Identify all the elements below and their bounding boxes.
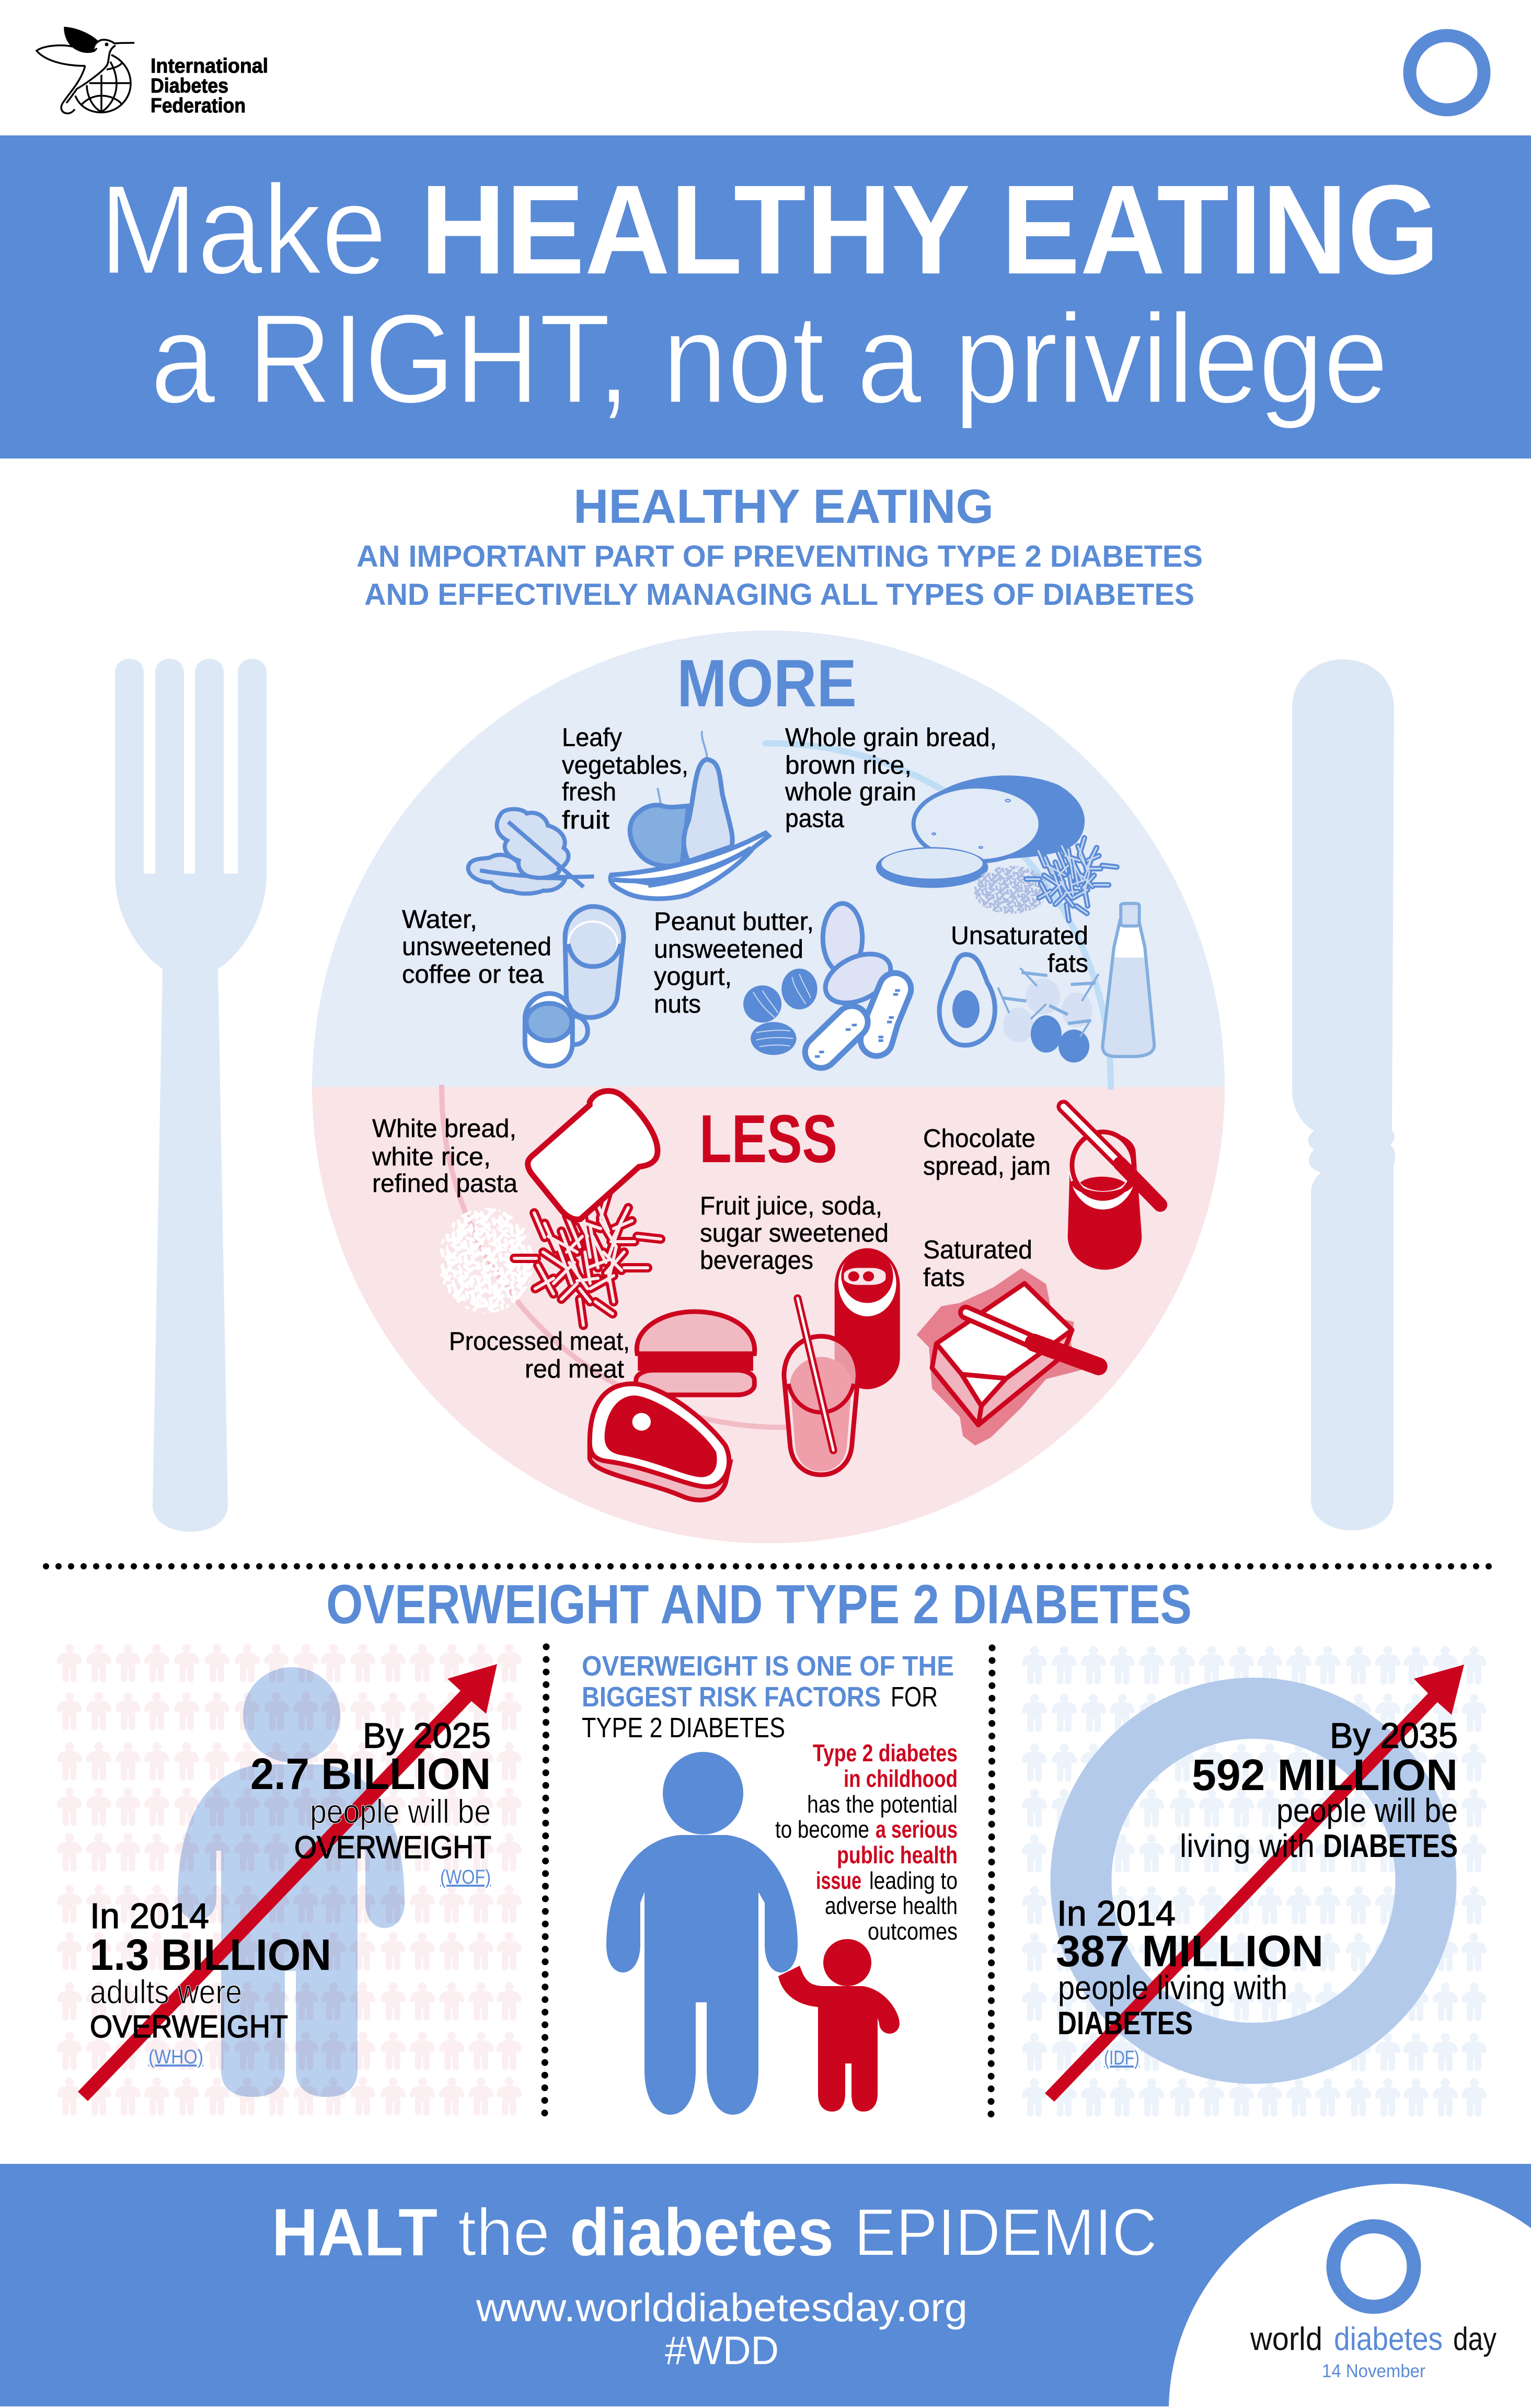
title line 2: a RIGHT, not a privilege (151, 288, 1388, 430)
icon: chocolate spread jar (1063, 1107, 1160, 1270)
label: unsaturated fats: Unsaturated (951, 922, 1088, 950)
label: water (402, 905, 551, 989)
icon: water glass (565, 907, 624, 1017)
title line 1: HEALTHY EATING (420, 159, 1440, 301)
stat: in 2014 (90, 1896, 331, 2068)
icon: blue circle top right (1410, 36, 1484, 110)
plate inner rim upper (766, 743, 1111, 1087)
label: white bread: refined pasta (372, 1169, 518, 1198)
icon: coffee cup (525, 993, 588, 1066)
icon: refined pasta (514, 1192, 661, 1325)
stat: in 2014 diabetes: (IDF) (1104, 2047, 1139, 2069)
footer slogan (272, 2195, 1157, 2270)
stat: by 2025: OVERWEIGHT (294, 1830, 491, 1865)
label: chocolate spread: spread, jam (923, 1152, 1051, 1180)
group: less foods (528, 1091, 1160, 1500)
arrow: overweight trend (78, 1664, 497, 2101)
panel: plate (312, 630, 1225, 1543)
label: processed meat (449, 1327, 630, 1383)
footer banner (0, 2164, 1531, 2406)
childhood diabetes note (775, 1739, 958, 1945)
childhood diabetes note: Type 2 diabetes (813, 1739, 958, 1767)
label: leafy vegetables: Leafy (562, 724, 622, 752)
icon: blue circle (1333, 2226, 1414, 2307)
icon: butter (917, 1268, 1099, 1446)
icon: soda can (835, 1248, 900, 1389)
childhood diabetes note: to become (775, 1816, 869, 1843)
label: whole grain: pasta (785, 805, 845, 833)
icon: steak (590, 1384, 730, 1500)
plate inner rim lower (442, 1085, 787, 1427)
childhood diabetes note: issue (816, 1867, 861, 1894)
stat: by 2025: 2.7 BILLION (250, 1749, 491, 1798)
icon: fruit (611, 731, 768, 899)
icon: brown rice (973, 866, 1049, 914)
panel: risk factors (582, 1650, 958, 2115)
stat: by 2035 (1180, 1716, 1458, 1864)
child figure (778, 1939, 900, 2112)
label: unsaturated fats: fats (1047, 949, 1088, 978)
stat: by 2035: By 2035 (1330, 1716, 1458, 1756)
big overweight person (178, 1667, 405, 2097)
stat: in 2014 diabetes: In 2014 (1057, 1894, 1176, 1933)
stat: by 2035: people will be (1276, 1792, 1458, 1829)
label: peanut butter: Peanut butter, (654, 908, 814, 936)
risk factors heading: TYPE 2 DIABETES (582, 1712, 785, 1744)
plate upper half: more (312, 630, 1225, 1087)
label: processed meat: Processed meat, (449, 1327, 630, 1356)
icon: yogurt and nuts (743, 903, 903, 1057)
childhood diabetes note: leading to (869, 1867, 958, 1894)
title banner (0, 135, 1531, 458)
vertical dotted separator right (991, 1648, 992, 2115)
vertical dotted separator left (545, 1647, 546, 2115)
label: saturated fats: Saturated (923, 1236, 1032, 1264)
label: white bread: White bread, (372, 1115, 516, 1143)
label: water: unsweetened (402, 933, 551, 961)
label: beverages: sugar sweetened (700, 1219, 889, 1247)
badge wordmark: world (1250, 2321, 1322, 2357)
label: white bread: white rice, (372, 1143, 491, 1171)
hummingbird and globe mark (37, 28, 134, 113)
label: peanut butter: unsweetened (654, 935, 803, 964)
label: saturated fats (923, 1236, 1032, 1292)
footer slogan: diabetes (570, 2195, 834, 2270)
badge date: 14 November (1322, 2361, 1425, 2381)
stat: by 2025 (250, 1716, 491, 1888)
risk factors heading: BIGGEST RISK FACTORS (582, 1681, 881, 1713)
label: peanut butter: yogurt, (654, 962, 732, 991)
group: more foods (468, 731, 1154, 1066)
logo wordmark: Diabetes (151, 75, 228, 97)
risk factors heading: OVERWEIGHT IS ONE OF THE (582, 1650, 954, 1682)
risk factors heading: FOR (891, 1681, 938, 1713)
world diabetes day badge (1169, 2184, 1531, 2406)
childhood diabetes note: has the potential (807, 1791, 958, 1818)
label: processed meat: red meat (525, 1355, 624, 1383)
icon: juice glass with straw (784, 1298, 858, 1475)
panel: diabetes statistics (1022, 1646, 1487, 2117)
stat: by 2025: By 2025 (363, 1716, 491, 1756)
pink figure grid (57, 1644, 522, 2116)
label: water: coffee or tea (402, 960, 544, 989)
plate lower half: less (312, 1087, 1225, 1543)
label: chocolate spread: Chocolate (923, 1125, 1035, 1153)
heading: healthy eating (356, 480, 1203, 612)
stat: by 2025: people will be (310, 1793, 491, 1830)
blue diabetes circle (1081, 1708, 1426, 2054)
label: leafy vegetables: fresh (562, 778, 616, 806)
footer slogan: EPIDEMIC (854, 2195, 1157, 2270)
childhood diabetes note: a serious (876, 1816, 958, 1843)
icon: burger (636, 1312, 755, 1395)
adult figure (606, 1752, 798, 2115)
stat: in 2014 diabetes: DIABETES (1057, 2005, 1193, 2042)
childhood diabetes note: adverse health (825, 1892, 958, 1919)
stat: by 2035: DIABETES (1323, 1828, 1458, 1864)
label: beverages: Fruit juice, soda, (700, 1192, 882, 1220)
footer hashtag: #WDD (665, 2329, 779, 2373)
label: beverages (700, 1192, 889, 1275)
IDF logo (37, 28, 268, 117)
label: peanut butter: nuts (654, 990, 701, 1018)
icon: blue pasta (1026, 838, 1117, 921)
label: whole grain: whole grain (785, 778, 916, 806)
childhood diabetes note: public health (837, 1841, 958, 1868)
icon: whole grain bread (876, 775, 1085, 888)
stat: in 2014: In 2014 (90, 1896, 209, 1936)
stat: by 2035: living with (1180, 1828, 1315, 1864)
label: whole grain: Whole grain bread, (785, 724, 997, 752)
icon: avocado (939, 955, 995, 1045)
arrow: diabetes trend (1045, 1665, 1464, 2102)
icon: leafy vegetables (468, 809, 594, 893)
stat: in 2014 diabetes: people living with (1058, 1969, 1287, 2006)
icon: knife (1292, 659, 1395, 1530)
label: leafy vegetables (562, 724, 688, 834)
logo wordmark (151, 55, 268, 117)
footer slogan: the (458, 2195, 550, 2270)
label: leafy vegetables: fruit (562, 806, 609, 834)
label: whole grain (785, 724, 997, 833)
label: whole grain: brown rice, (785, 751, 912, 779)
heading: less: LESS (699, 1100, 837, 1177)
icon: olives (998, 968, 1099, 1062)
label: chocolate spread (923, 1125, 1051, 1180)
stat: in 2014: OVERWEIGHT (90, 2009, 288, 2044)
stat: in 2014: adults were (90, 1973, 242, 2011)
icon: white bread (528, 1091, 658, 1220)
label: beverages: beverages (700, 1246, 813, 1275)
badge wordmark (1250, 2321, 1497, 2357)
heading: healthy eating: HEALTHY EATING (573, 480, 994, 533)
stat: by 2025: (WOF) (440, 1866, 491, 1888)
label: white bread (372, 1115, 518, 1198)
panel: overweight statistics (57, 1644, 522, 2116)
childhood diabetes note: in childhood (844, 1765, 958, 1792)
label: unsaturated fats (951, 922, 1088, 978)
stat: in 2014 diabetes: 387 MILLION (1056, 1927, 1323, 1976)
heading: more: MORE (677, 646, 857, 721)
badge wordmark: day (1453, 2321, 1497, 2357)
horizontal dotted separator (46, 1563, 1490, 1569)
logo wordmark: Federation (151, 95, 246, 117)
icon: white rice (439, 1208, 534, 1313)
logo wordmark: International (151, 55, 268, 77)
heading: healthy eating: AN IMPORTANT PART OF PREVENTING TYPE 2 DIABETES (356, 540, 1203, 574)
label: saturated fats: fats (923, 1264, 965, 1292)
blue figure grid (1022, 1646, 1487, 2117)
stat: in 2014: (WHO) (148, 2046, 203, 2068)
badge wordmark: diabetes (1334, 2321, 1443, 2357)
risk factors heading (582, 1650, 954, 1744)
stat: by 2035: 592 MILLION (1192, 1750, 1458, 1799)
icon: fork (115, 659, 267, 1532)
heading: healthy eating: AND EFFECTIVELY MANAGING ALL TYPES OF DIABETES (364, 578, 1194, 612)
heading: overweight and type 2 diabetes: OVERWEIGHT AND TYPE 2 DIABETES (326, 1574, 1192, 1635)
icon: oil bottle (1102, 903, 1154, 1057)
footer url: www.worlddiabetesday.org (476, 2286, 968, 2330)
stat: in 2014: 1.3 BILLION (90, 1930, 331, 1979)
stat: in 2014 diabetes (1056, 1894, 1323, 2069)
label: peanut butter (654, 908, 814, 1018)
label: water: Water, (402, 905, 477, 934)
footer slogan: HALT (272, 2195, 438, 2270)
title line 1: Make (99, 159, 387, 301)
label: leafy vegetables: vegetables, (562, 751, 688, 779)
childhood diabetes note: outcomes (868, 1918, 958, 1945)
